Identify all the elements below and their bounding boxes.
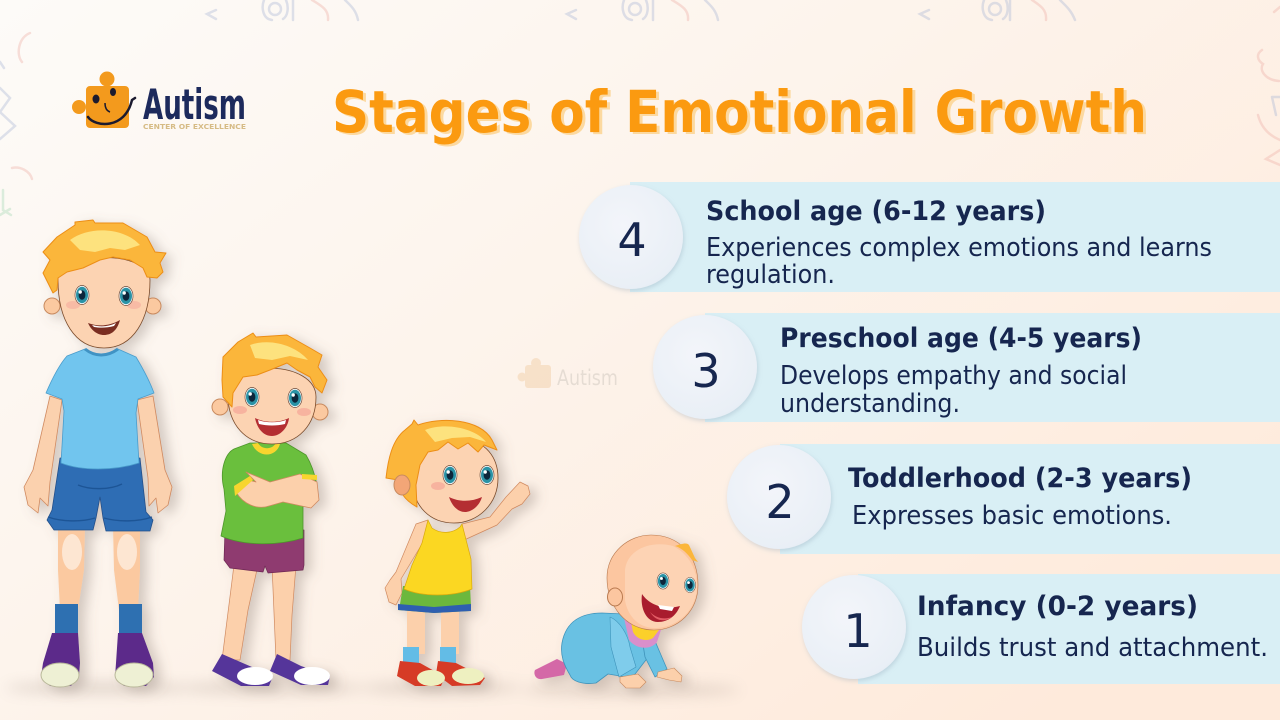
ears	[44, 298, 60, 314]
stage heading: Preschool age (4-5 years)	[780, 323, 1142, 354]
child: crawling baby	[534, 535, 698, 688]
band	[858, 574, 1280, 684]
shirt	[221, 443, 317, 544]
title: Stages of Emotional Growth	[335, 80, 1150, 148]
child: oldest boy, blue shirt	[24, 220, 172, 687]
stage heading: School age (6-12 years)	[706, 196, 1046, 227]
legs	[58, 525, 85, 610]
number badge	[579, 185, 683, 289]
stage 1: Infancy	[802, 574, 1280, 684]
number badge	[802, 575, 906, 679]
watermark: Autism	[557, 366, 618, 390]
child: toddler, yellow tank top	[385, 420, 530, 686]
stage description: understanding.	[780, 389, 960, 419]
hair tuft	[675, 543, 698, 562]
logo tagline: CENTER OF EXCELLENCE	[143, 123, 246, 131]
ear	[608, 588, 622, 606]
stage 2: Toddlerhood	[727, 444, 1280, 554]
head	[607, 535, 698, 630]
decorative doodle pattern	[0, 0, 1280, 215]
shorts	[398, 586, 471, 613]
band	[630, 182, 1280, 292]
stage heading: Infancy (0-2 years)	[917, 591, 1198, 622]
tank top	[404, 520, 472, 595]
band	[780, 444, 1280, 554]
shorts	[224, 530, 304, 573]
arms	[24, 396, 62, 513]
number badge: 4	[617, 213, 647, 267]
stage description: regulation.	[706, 260, 835, 290]
lower arm	[385, 520, 428, 605]
shorts	[47, 458, 153, 531]
head	[413, 440, 498, 523]
head	[58, 258, 150, 348]
shoes	[212, 654, 273, 686]
stage description	[706, 233, 1212, 290]
hair	[43, 220, 166, 293]
ground shadows	[5, 682, 740, 696]
number badge	[653, 315, 757, 419]
shoes	[41, 633, 80, 686]
stage 3: Preschool age	[653, 313, 1280, 422]
body	[561, 613, 649, 684]
hair	[386, 420, 497, 507]
watermark	[518, 358, 618, 390]
stage description: Develops empathy and social	[780, 361, 1127, 391]
child: second boy, green shirt	[212, 333, 330, 686]
socks	[403, 647, 419, 664]
hair	[222, 333, 327, 407]
raised arm	[462, 482, 530, 541]
bib	[624, 618, 661, 648]
crossed arms	[236, 472, 319, 508]
stage heading: Toddlerhood (2-3 years)	[848, 463, 1192, 494]
ear	[394, 475, 410, 495]
shoes	[397, 661, 445, 686]
logo: Autism Center of Excellence	[72, 72, 246, 131]
stage description: Builds trust and attachment.	[917, 633, 1268, 663]
stage description: Experiences complex emotions and learns	[706, 233, 1212, 263]
number badge: 3	[691, 344, 721, 398]
stage description	[780, 361, 1127, 419]
number badge	[727, 445, 831, 549]
icon: puzzle piece smiley	[72, 72, 135, 128]
number badge: 1	[843, 604, 873, 658]
legs	[222, 565, 258, 660]
stage description: Expresses basic emotions.	[852, 501, 1172, 531]
number badge: 2	[765, 475, 795, 529]
socks	[55, 604, 78, 638]
ears	[212, 399, 228, 415]
legs	[407, 608, 425, 654]
head	[228, 368, 316, 444]
shirt	[46, 349, 154, 469]
title: Stages of Emotional Growth	[332, 78, 1147, 146]
hands	[620, 674, 646, 688]
logo wordmark: Autism	[143, 80, 246, 129]
foot	[534, 659, 567, 679]
band	[705, 313, 1280, 422]
stage 4: School age	[579, 182, 1280, 292]
